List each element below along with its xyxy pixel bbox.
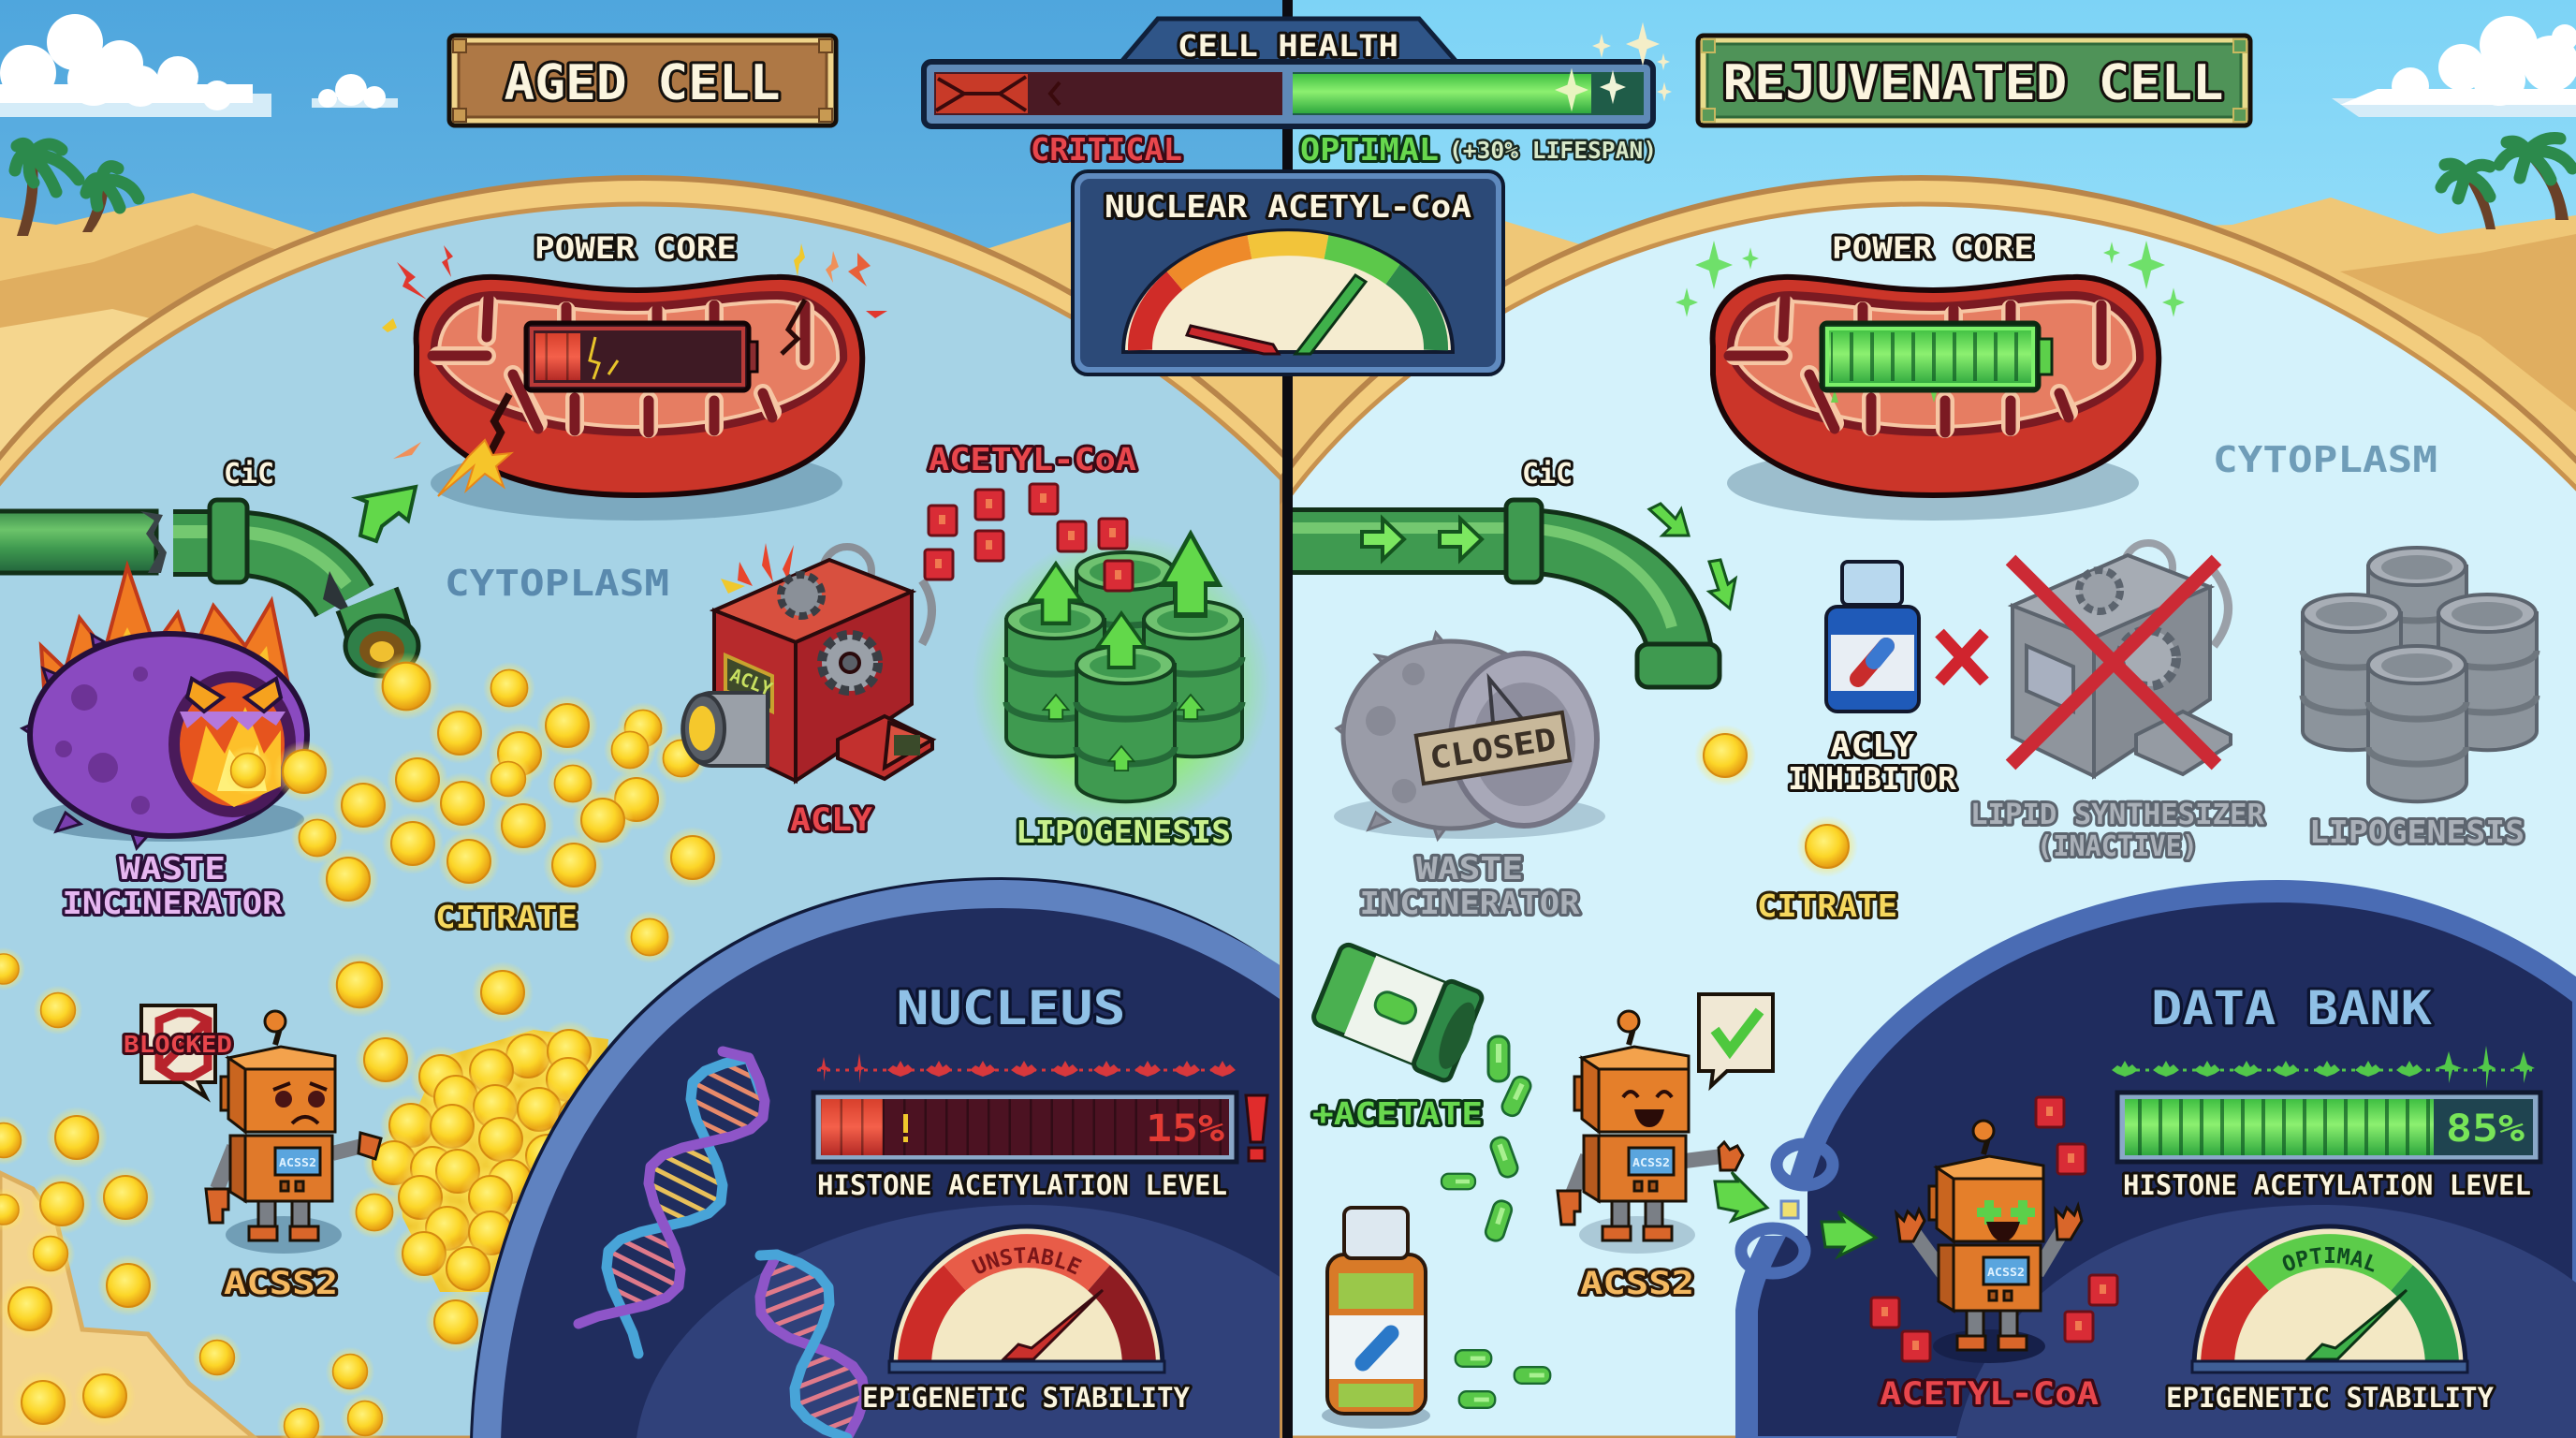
label: citrate: CITRATE xyxy=(435,899,578,935)
chart: epigenetic stability gauge (optimal) xyxy=(2192,1226,2467,1372)
icon: full battery xyxy=(1822,323,2052,390)
chart: green waveform xyxy=(2112,1046,2535,1089)
cytoplasm xyxy=(0,204,1296,1438)
icon: blocked speech bubble: BLOCKED xyxy=(124,1031,232,1058)
sign: closed xyxy=(1416,712,1570,784)
icon: sparkles near health bar xyxy=(1592,22,1672,101)
bar: critical side xyxy=(934,72,1282,115)
chart: histone acetylation bar 85%: 85% xyxy=(2446,1108,2525,1151)
label: waste incinerator (grey): INCINERATOR xyxy=(1359,885,1580,921)
icon: burning waste incinerator xyxy=(22,566,307,848)
header tab xyxy=(1121,19,1456,62)
membrane: outer sand rim xyxy=(1282,178,2576,1438)
icon: low battery xyxy=(526,323,757,390)
sign: closed: CLOSED xyxy=(1427,721,1559,776)
label: +acetate: +ACETATE xyxy=(1312,1095,1483,1132)
label: histone acetylation (rejuvenated): HISTONE ACETYLATION LEVEL xyxy=(2123,1169,2531,1201)
chart: epigenetic stability gauge (unstable) xyxy=(887,1225,1166,1374)
background: sky and desert xyxy=(1288,0,2576,506)
chart: histone acetylation bar 15%: 15% xyxy=(1146,1108,1224,1151)
panel: cell health bar xyxy=(924,19,1653,126)
acetyl-CoA blocks xyxy=(925,484,1133,591)
gauge dial xyxy=(1123,230,1453,354)
acetyl-CoA blocks xyxy=(1871,1097,2117,1361)
icon: orange supplement bottle xyxy=(1322,1208,1430,1429)
label: ACSS2 (rejuvenated): ACSS2 xyxy=(1580,1265,1694,1302)
label: epigenetic stability (rejuvenated): EPIGENETIC STABILITY xyxy=(2166,1382,2495,1414)
label: ACLY inhibitor: INHIBITOR xyxy=(1788,760,1956,797)
icon: cheering robot with acetyl-CoA xyxy=(1896,1121,2082,1363)
label: epigenetic stability (aged): EPIGENETIC STABILITY xyxy=(862,1382,1191,1414)
chart: red waveform xyxy=(817,1053,1236,1083)
label: acetyl-CoA (aged): ACETYL-CoA xyxy=(929,441,1136,477)
panel: data bank xyxy=(1735,880,2576,1438)
label: lipid synthesizer: (INACTIVE) xyxy=(2037,830,2198,863)
label: nuclear acetyl-CoA: NUCLEAR ACETYL-CoA xyxy=(1105,188,1471,225)
center divider xyxy=(1282,0,1293,1438)
icon: palm trees xyxy=(15,143,139,236)
icon: palm trees xyxy=(2441,139,2572,229)
label: power core: POWER CORE xyxy=(1832,230,2034,266)
label: acetyl-CoA (rejuvenated): ACETYL-CoA xyxy=(1880,1375,2099,1413)
cytoplasm xyxy=(1282,204,2576,1438)
label: lifespan note: (+30% LIFESPAN) xyxy=(1449,137,1657,164)
icon: spilled acetate pills xyxy=(1442,1036,1550,1408)
icon: DNA helix 2 xyxy=(760,1255,865,1438)
label: waste incinerator xyxy=(62,850,283,921)
label: waste incinerator: INCINERATOR xyxy=(62,885,283,921)
icon: intact CiC pipe xyxy=(1282,500,1720,687)
panel: rejuvenated cell (right half) xyxy=(1280,0,2576,1438)
label: lipid synthesizer xyxy=(1970,799,2265,863)
label: waste incinerator: WASTE xyxy=(119,850,226,887)
chart: epigenetic stability gauge (unstable): UNSTABLE xyxy=(972,1247,1082,1275)
label: aged cell title plate xyxy=(449,36,836,125)
label: ACLY inhibitor: ACLY xyxy=(1830,727,1914,764)
icon: glowing green lipid barrels with arrows xyxy=(972,534,1271,833)
needle: green xyxy=(1295,275,1366,354)
icon: sad robot ACSS2 xyxy=(206,1011,381,1254)
icon: green sparkles xyxy=(1676,241,2185,317)
icon: broken CiC pipe xyxy=(0,500,418,676)
icon: cloud xyxy=(2332,16,2576,117)
citrate particles xyxy=(0,653,724,1438)
panel: nuclear acetyl-CoA gauge xyxy=(1073,171,1503,374)
label: ACLY: ACLY xyxy=(790,801,873,839)
label: data bank: DATA BANK xyxy=(2151,981,2432,1035)
label: lipogenesis (grey): LIPOGENESIS xyxy=(2309,814,2525,850)
icon: spark at crack xyxy=(438,440,511,496)
arrow: green up-right xyxy=(358,487,416,541)
icon: healthy mitochondrion xyxy=(1713,277,2159,521)
icon: check speech bubble xyxy=(1699,994,1773,1086)
icon: inactive lipid synthesizer xyxy=(2012,543,2231,776)
label: histone acetylation (aged): HISTONE ACETYLATION LEVEL xyxy=(817,1169,1227,1201)
icon: warning mark xyxy=(1246,1095,1267,1161)
icon: red bolts around mitochondrion xyxy=(382,243,887,459)
label: rejuvenated cell title plate: REJUVENATED CELL xyxy=(1722,55,2224,111)
bar: optimal side xyxy=(1293,68,1644,115)
label: lipid synthesizer: LIPID SYNTHESIZER xyxy=(1970,799,2265,831)
bar frame xyxy=(924,62,1653,126)
label: cytoplasm: CYTOPLASM xyxy=(2213,439,2437,480)
icon: ACLY machine xyxy=(682,543,932,781)
chart: epigenetic stability gauge (optimal): OPTIMAL xyxy=(2282,1247,2374,1272)
chart: histone acetylation bar 15% xyxy=(813,1093,1237,1162)
label: ACSS2 (aged): ACSS2 xyxy=(224,1265,338,1302)
icon: damaged mitochondrion xyxy=(417,277,862,521)
label: cytoplasm: CYTOPLASM xyxy=(445,563,669,604)
icon: clouds xyxy=(0,14,398,117)
panel: nucleus xyxy=(470,877,1280,1438)
icon: tipped acetate bottle xyxy=(1310,938,1487,1084)
icon: grey barrels xyxy=(2303,548,2537,801)
icon: big red cross xyxy=(2011,560,2217,765)
label: ACLY inhibitor xyxy=(1788,727,1956,797)
label: power core: POWER CORE xyxy=(534,230,737,266)
label: rejuvenated cell title plate xyxy=(1698,36,2250,125)
label: citrate: CITRATE xyxy=(1757,888,1897,924)
label: nucleus: NUCLEUS xyxy=(897,981,1125,1035)
background: sky and desert xyxy=(0,0,1288,506)
chart: histone acetylation bar 85% xyxy=(2117,1093,2540,1162)
arrows: flow down-right xyxy=(1649,504,1735,609)
label: optimal: OPTIMAL xyxy=(1300,131,1439,168)
label: aged cell title plate: AGED CELL xyxy=(504,55,781,111)
icon: blocked speech bubble xyxy=(124,1005,232,1097)
sand pile bottom left xyxy=(0,1173,255,1438)
icon: happy robot ACSS2 xyxy=(1558,1011,1743,1254)
citrate particles xyxy=(1694,725,1858,877)
needle: red xyxy=(1187,326,1279,354)
label: CiC: CiC xyxy=(1522,458,1573,491)
icon: ACLY inhibitor bottle xyxy=(1826,562,1919,712)
arrows in pipe xyxy=(1362,519,1482,560)
label: waste incinerator (grey) xyxy=(1359,850,1580,921)
label: critical: CRITICAL xyxy=(1031,131,1182,168)
nuclear pore xyxy=(1741,1144,1833,1273)
icon: DNA helix 1 xyxy=(578,1051,765,1354)
icon: ACLY machine: ACLY xyxy=(727,664,775,700)
icon: red x xyxy=(1939,633,1984,682)
label: CiC: CiC xyxy=(224,458,274,491)
icon: closed grey incinerator xyxy=(1334,633,1605,839)
arrows: into data bank xyxy=(1715,1172,1876,1256)
panel: aged cell (left half) xyxy=(0,0,1282,1438)
label: lipogenesis (aged): LIPOGENESIS xyxy=(1016,814,1231,850)
membrane: outer sand rim xyxy=(0,178,1296,1438)
label: cell health: CELL HEALTH xyxy=(1178,28,1398,64)
label: waste incinerator (grey): WASTE xyxy=(1416,850,1523,887)
